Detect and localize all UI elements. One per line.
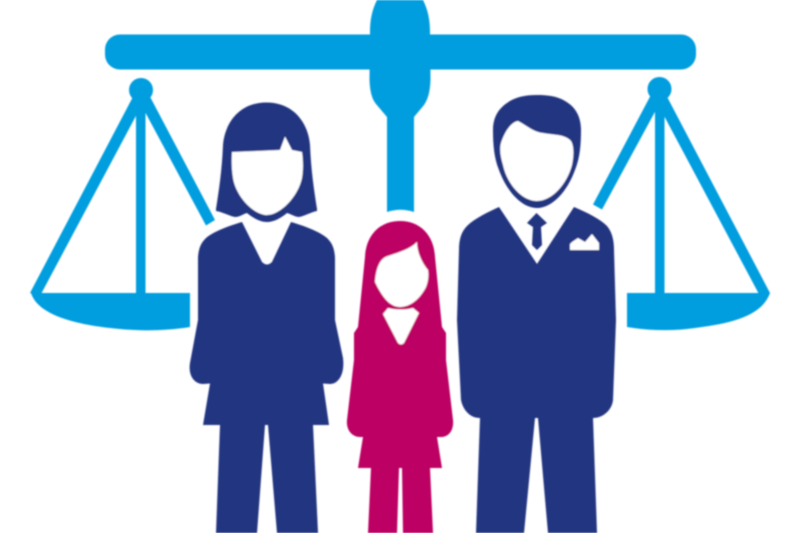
man body (457, 207, 616, 533)
woman hair (216, 102, 317, 222)
right pan (593, 77, 770, 330)
woman body (190, 222, 343, 533)
central post (370, 0, 430, 212)
girl collar (383, 308, 419, 344)
man tie (527, 213, 547, 250)
man pocket square (570, 234, 599, 250)
man hair (493, 95, 581, 208)
left pan (30, 78, 215, 330)
icon: scales of justice (30, 0, 770, 330)
figure: girl (347, 221, 453, 533)
girl body and hair (347, 221, 453, 533)
girl face (375, 242, 428, 307)
woman face (232, 136, 303, 215)
figure: woman (190, 102, 343, 533)
man face (500, 121, 573, 201)
scale beam (105, 34, 696, 70)
figure: man (457, 95, 616, 533)
